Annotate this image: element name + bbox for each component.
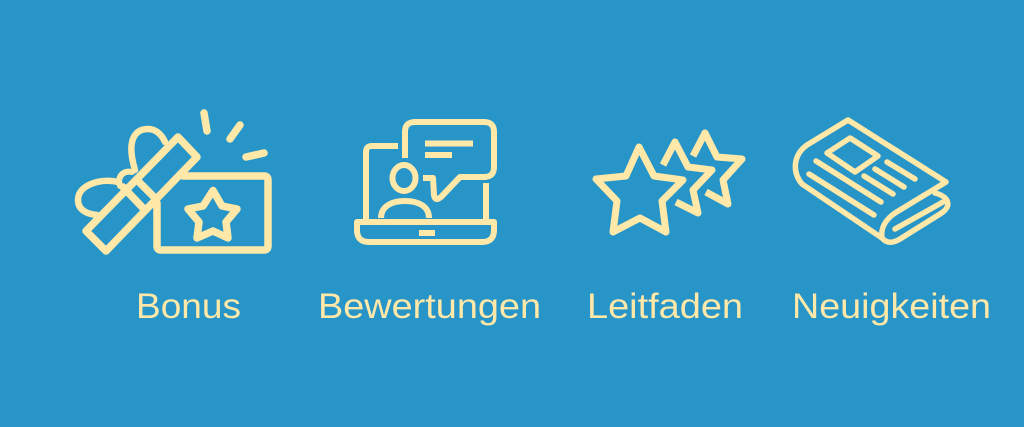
icon: open gift box <box>78 113 268 251</box>
label: Neuigkeiten: Neuigkeiten <box>792 287 991 326</box>
label: Bewertungen: Bewertungen <box>318 287 541 326</box>
icon: three stars <box>596 133 742 232</box>
label: Bonus: Bonus <box>136 287 241 326</box>
label: Leitfaden: Leitfaden <box>587 287 743 326</box>
icon: laptop with speech bubble <box>357 122 494 242</box>
icon: folded newspaper <box>795 120 948 242</box>
